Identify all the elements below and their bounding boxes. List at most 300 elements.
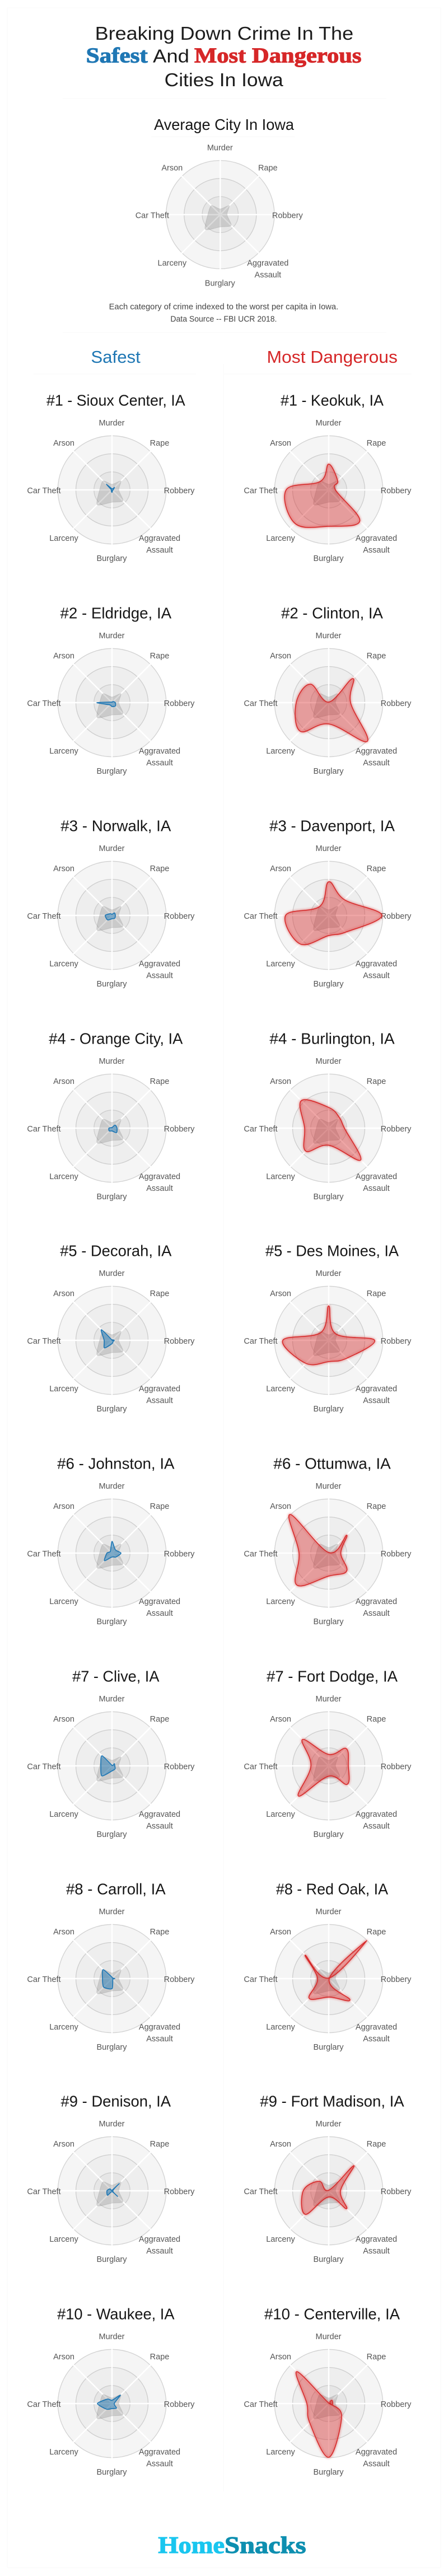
- axis labels: [27, 1908, 195, 2052]
- axis labels: Burglary: [314, 2468, 344, 2477]
- axis labels: Rape: [367, 2353, 386, 2362]
- axis labels: Larceny: [49, 1597, 79, 1606]
- axis labels: Assault: [363, 546, 390, 555]
- panel: #9 Fort Madison: [244, 2092, 412, 2264]
- axis labels: Larceny: [266, 960, 296, 969]
- heading: #1 - Keokuk, IA: [281, 391, 384, 409]
- column heading: safest: Safest: [91, 347, 141, 367]
- axis labels: Larceny: [266, 2448, 296, 2457]
- axis labels: Rape: [150, 2353, 169, 2362]
- panel: #4 Orange City: [27, 1030, 195, 1201]
- heading: #3 - Davenport, IA: [269, 817, 395, 834]
- heading: #7 - Clive, IA: [72, 1667, 160, 1685]
- axis labels: Aggravated: [356, 2448, 397, 2457]
- axis labels: Assault: [363, 1609, 390, 1618]
- title: Cities In Iowa: [165, 69, 283, 90]
- axis labels: Car Theft: [27, 1125, 61, 1134]
- data shape: [295, 679, 368, 742]
- axis labels: Assault: [363, 2460, 390, 2469]
- axis labels: Car Theft: [27, 1975, 61, 1984]
- axis labels: Burglary: [96, 1193, 127, 1201]
- axis labels: Aggravated: [139, 2448, 180, 2457]
- axis labels: Car Theft: [244, 699, 278, 708]
- axis labels: Robbery: [381, 487, 412, 495]
- axis labels: Assault: [146, 2247, 173, 2256]
- panel: #7 Fort Dodge: [244, 1667, 412, 1839]
- radar chart: [244, 1269, 412, 1414]
- axis labels: Car Theft: [27, 2400, 61, 2409]
- axis labels: Burglary: [314, 1617, 344, 1626]
- data shape: [97, 2395, 120, 2409]
- heading: #4 - Burlington, IA: [269, 1030, 395, 1047]
- axis labels: Assault: [363, 1822, 390, 1831]
- axis labels: Arson: [161, 163, 183, 172]
- axis labels: Burglary: [314, 1405, 344, 1414]
- axis labels: Rape: [150, 864, 169, 873]
- axis labels: Burglary: [96, 554, 127, 563]
- title: Safest: [86, 44, 148, 68]
- axis labels: Murder: [99, 632, 125, 641]
- axis labels: Burglary: [314, 554, 344, 563]
- panel: #1 Sioux Center: [27, 391, 195, 563]
- heading: #8 - Red Oak, IA: [276, 1880, 388, 1897]
- heading: #7 - Fort Dodge, IA: [267, 1667, 398, 1685]
- axis labels: [244, 1482, 412, 1626]
- axis labels: Robbery: [381, 699, 412, 708]
- data shape: [301, 2166, 354, 2214]
- radar chart: [27, 1269, 195, 1414]
- axis labels: [27, 844, 195, 989]
- heading: #10 - Waukee, IA: [57, 2305, 175, 2322]
- axis labels: [244, 1057, 412, 1201]
- heading: #8 - Carroll, IA: [66, 1880, 166, 1897]
- axis labels: Assault: [146, 1396, 173, 1405]
- data shape: [298, 1740, 349, 1796]
- axis labels: Assault: [146, 1822, 173, 1831]
- data shape: [284, 464, 360, 527]
- axis labels: Burglary: [314, 767, 344, 776]
- axis labels: Car Theft: [136, 211, 169, 220]
- axis labels: Arson: [270, 2353, 291, 2362]
- data shape: [296, 2372, 342, 2457]
- radar chart: [27, 844, 195, 989]
- data shape: [106, 484, 115, 493]
- axis labels: Aggravated: [139, 1172, 180, 1181]
- axis labels: [27, 632, 195, 776]
- axis labels: Murder: [316, 2120, 342, 2129]
- axis labels: Rape: [150, 1502, 169, 1511]
- axis labels: [244, 2332, 412, 2477]
- radar chart: [244, 632, 412, 776]
- axis labels: Car Theft: [27, 2187, 61, 2196]
- axis labels: Arson: [53, 2140, 74, 2149]
- axis labels: Rape: [367, 652, 386, 661]
- axis labels: Burglary: [96, 767, 127, 776]
- axis labels: Car Theft: [244, 912, 278, 921]
- axis labels: Rape: [367, 1715, 386, 1724]
- radar chart: [244, 1482, 412, 1626]
- axis labels: Murder: [99, 1057, 125, 1066]
- axis labels: Assault: [363, 759, 390, 768]
- title: [86, 23, 361, 90]
- heading: #9 - Denison, IA: [60, 2092, 171, 2110]
- axis labels: Larceny: [266, 2235, 296, 2244]
- axis labels: Arson: [53, 1502, 74, 1511]
- axis labels: Murder: [316, 1908, 342, 1916]
- axis labels: Aggravated: [356, 2023, 397, 2032]
- panel: #3 Davenport: [244, 817, 412, 989]
- axis labels: Car Theft: [244, 1337, 278, 1346]
- axis labels: Murder: [99, 1482, 125, 1491]
- axis labels: Larceny: [266, 747, 296, 756]
- axis labels: Rape: [150, 1077, 169, 1086]
- axis labels: Robbery: [164, 1762, 195, 1771]
- axis labels: Car Theft: [244, 2187, 278, 2196]
- axis labels: Robbery: [381, 912, 412, 921]
- axis labels: [136, 143, 303, 288]
- heading: #6 - Johnston, IA: [57, 1455, 175, 1472]
- axis labels: Robbery: [164, 1550, 195, 1559]
- axis labels: [27, 1269, 195, 1414]
- radar chart: [27, 2332, 195, 2477]
- axis labels: Aggravated: [139, 960, 180, 969]
- axis labels: Assault: [146, 971, 173, 980]
- axis labels: Larceny: [266, 1172, 296, 1181]
- radar chart: [27, 2120, 195, 2264]
- panel: #7 Clive: [27, 1667, 195, 1839]
- heading: #3 - Norwalk, IA: [60, 817, 171, 834]
- column heading: most dangerous: Most Dangerous: [267, 347, 398, 367]
- axis labels: Burglary: [314, 2255, 344, 2264]
- panel: #10 Waukee: [27, 2305, 195, 2477]
- axis labels: Murder: [316, 419, 342, 428]
- axis labels: Aggravated: [139, 2235, 180, 2244]
- axis labels: Robbery: [164, 487, 195, 495]
- axis labels: Burglary: [96, 1405, 127, 1414]
- axis labels: Murder: [316, 632, 342, 641]
- data shape: [101, 1756, 115, 1776]
- axis labels: Larceny: [266, 1810, 296, 1819]
- axis labels: Larceny: [49, 1385, 79, 1394]
- axis labels: Burglary: [96, 980, 127, 989]
- axis labels: Robbery: [272, 211, 303, 220]
- data shape: [285, 882, 382, 945]
- axis labels: Assault: [146, 1609, 173, 1618]
- axis labels: Aggravated: [356, 534, 397, 543]
- data shape: [282, 1306, 375, 1365]
- axis labels: [244, 1269, 412, 1414]
- axis labels: Larceny: [49, 1810, 79, 1819]
- axis labels: Larceny: [266, 2023, 296, 2032]
- axis labels: Assault: [255, 270, 281, 279]
- axis labels: Murder: [99, 1695, 125, 1704]
- axis labels: Rape: [367, 864, 386, 873]
- axis labels: Aggravated: [356, 1172, 397, 1181]
- heading: #10 - Centerville, IA: [264, 2305, 400, 2322]
- axis labels: Larceny: [266, 534, 296, 543]
- axis labels: Arson: [53, 1077, 74, 1086]
- panel: #6 Ottumwa: [244, 1455, 412, 1626]
- axis labels: Rape: [367, 1502, 386, 1511]
- axis labels: Larceny: [266, 1385, 296, 1394]
- axis labels: Robbery: [381, 1975, 412, 1984]
- axis labels: Larceny: [49, 1172, 79, 1181]
- axis labels: Car Theft: [244, 2400, 278, 2409]
- axis labels: Rape: [150, 1715, 169, 1724]
- axis labels: [244, 844, 412, 989]
- axis labels: [244, 2120, 412, 2264]
- axis labels: Aggravated: [356, 747, 397, 756]
- panel: #2 Clinton: [244, 604, 412, 776]
- axis labels: Larceny: [49, 534, 79, 543]
- axis labels: Larceny: [49, 2235, 79, 2244]
- panel: #1 Keokuk: [244, 391, 412, 563]
- axis labels: [244, 1695, 412, 1839]
- data shape: [102, 1970, 115, 1989]
- data shape: [109, 1125, 117, 1133]
- axis labels: Burglary: [96, 1617, 127, 1626]
- logo: HomeSnacks: Snacks: [225, 2533, 306, 2559]
- radar chart: [27, 1908, 195, 2052]
- axis labels: Burglary: [314, 1830, 344, 1839]
- axis labels: Murder: [316, 844, 342, 853]
- heading: #5 - Decorah, IA: [60, 1242, 172, 1259]
- panel: #9 Denison: [27, 2092, 195, 2264]
- axis labels: Murder: [207, 143, 233, 152]
- axis labels: [27, 1482, 195, 1626]
- panel: #5 Des Moines: [244, 1242, 412, 1414]
- axis labels: Aggravated: [356, 1810, 397, 1819]
- data source note: Data Source -- FBI UCR 2018.: [170, 315, 277, 324]
- heading: #5 - Des Moines, IA: [265, 1242, 399, 1259]
- axis labels: Robbery: [381, 1550, 412, 1559]
- panel: #5 Decorah: [27, 1242, 195, 1414]
- axis labels: Robbery: [381, 1125, 412, 1134]
- axis labels: Car Theft: [244, 1125, 278, 1134]
- axis labels: Aggravated: [247, 259, 288, 268]
- heading: #1 - Sioux Center, IA: [46, 391, 185, 409]
- axis labels: Burglary: [96, 2255, 127, 2264]
- heading: #2 - Clinton, IA: [281, 604, 383, 621]
- title: Most Dangerous: [194, 44, 362, 68]
- axis labels: Burglary: [96, 2043, 127, 2052]
- axis labels: Assault: [146, 1184, 173, 1193]
- axis labels: Larceny: [49, 2023, 79, 2032]
- axis labels: Aggravated: [139, 1810, 180, 1819]
- axis labels: Murder: [316, 1482, 342, 1491]
- panel: #6 Johnston: [27, 1455, 195, 1626]
- axis labels: Arson: [270, 1289, 291, 1298]
- data shape: [289, 1514, 347, 1586]
- panel: #4 Burlington: [244, 1030, 412, 1201]
- axis labels: Assault: [363, 1396, 390, 1405]
- axis labels: Robbery: [381, 2400, 412, 2409]
- axis labels: Car Theft: [244, 1975, 278, 1984]
- axis labels: Larceny: [49, 960, 79, 969]
- axis labels: Rape: [367, 439, 386, 448]
- axis labels: Robbery: [164, 1337, 195, 1346]
- logo: HomeSnacks: [158, 2533, 306, 2559]
- axis labels: Robbery: [164, 912, 195, 921]
- data source note: [109, 303, 338, 324]
- axis labels: Car Theft: [27, 699, 61, 708]
- axis labels: Larceny: [49, 747, 79, 756]
- axis labels: Assault: [363, 1184, 390, 1193]
- axis labels: Rape: [367, 1928, 386, 1937]
- axis labels: Rape: [150, 2140, 169, 2149]
- data shape: [107, 2184, 119, 2196]
- panel: average city: [109, 116, 338, 324]
- axis labels: [27, 1057, 195, 1201]
- axis labels: Arson: [270, 864, 291, 873]
- heading: #4 - Orange City, IA: [49, 1030, 183, 1047]
- axis labels: Robbery: [164, 2400, 195, 2409]
- heading: #9 - Fort Madison, IA: [260, 2092, 404, 2110]
- axis labels: Arson: [270, 1502, 291, 1511]
- axis labels: Car Theft: [244, 487, 278, 495]
- axis labels: Car Theft: [27, 912, 61, 921]
- axis labels: Larceny: [49, 2448, 79, 2457]
- axis labels: Larceny: [266, 1597, 296, 1606]
- axis labels: [27, 2332, 195, 2477]
- axis labels: Murder: [99, 1269, 125, 1278]
- data shape: [101, 1330, 114, 1348]
- axis labels: Aggravated: [139, 747, 180, 756]
- heading: #2 - Eldridge, IA: [60, 604, 171, 621]
- panel: #3 Norwalk: [27, 817, 195, 989]
- axis labels: Assault: [363, 971, 390, 980]
- axis labels: Burglary: [314, 2043, 344, 2052]
- axis labels: Assault: [146, 759, 173, 768]
- data source note: Each category of crime indexed to the worst per capita in Iowa.: [109, 303, 338, 312]
- axis labels: Aggravated: [356, 1597, 397, 1606]
- axis labels: Car Theft: [27, 1550, 61, 1559]
- title: And: [153, 46, 189, 67]
- axis labels: Aggravated: [356, 1385, 397, 1394]
- axis labels: Rape: [367, 2140, 386, 2149]
- axis labels: Murder: [99, 419, 125, 428]
- axis labels: Murder: [99, 844, 125, 853]
- axis labels: [27, 2120, 195, 2264]
- title: Breaking Down Crime In The: [95, 23, 353, 44]
- axis labels: Aggravated: [139, 1597, 180, 1606]
- radar chart: [244, 2332, 412, 2477]
- radar chart: [27, 1057, 195, 1201]
- axis labels: [244, 632, 412, 776]
- axis labels: [27, 1695, 195, 1839]
- axis labels: Burglary: [205, 279, 236, 288]
- axis labels: Robbery: [164, 1975, 195, 1984]
- axis labels: Car Theft: [27, 487, 61, 495]
- axis labels: Arson: [53, 439, 74, 448]
- axis labels: Murder: [316, 1269, 342, 1278]
- axis labels: Robbery: [164, 699, 195, 708]
- axis labels: Arson: [53, 652, 74, 661]
- axis labels: Arson: [53, 1928, 74, 1937]
- axis labels: Aggravated: [139, 2023, 180, 2032]
- data shape: [300, 1100, 361, 1161]
- axis labels: Murder: [99, 2120, 125, 2129]
- axis labels: Rape: [150, 439, 169, 448]
- axis labels: Burglary: [96, 2468, 127, 2477]
- axis labels: Rape: [367, 1289, 386, 1298]
- radar chart: [27, 1695, 195, 1839]
- axis labels: Larceny: [158, 259, 187, 268]
- axis labels: Assault: [363, 2035, 390, 2044]
- radar chart: average city: [136, 143, 303, 288]
- axis labels: Arson: [270, 1928, 291, 1937]
- axis labels: Rape: [367, 1077, 386, 1086]
- axis labels: Rape: [150, 652, 169, 661]
- data shape: [97, 702, 115, 707]
- axis labels: Arson: [270, 652, 291, 661]
- axis labels: Arson: [53, 1289, 74, 1298]
- axis labels: Aggravated: [356, 2235, 397, 2244]
- data shape: [305, 1941, 367, 2001]
- axis labels: Aggravated: [139, 534, 180, 543]
- radar chart: [244, 1695, 412, 1839]
- axis labels: Arson: [53, 1715, 74, 1724]
- axis labels: Car Theft: [27, 1762, 61, 1771]
- radar chart: [244, 1057, 412, 1201]
- axis labels: Arson: [270, 2140, 291, 2149]
- axis labels: Aggravated: [139, 1385, 180, 1394]
- radar chart: [244, 844, 412, 989]
- axis labels: Burglary: [314, 1193, 344, 1201]
- axis labels: [27, 419, 195, 563]
- axis labels: Murder: [316, 2332, 342, 2341]
- axis labels: [244, 1908, 412, 2052]
- axis labels: Aggravated: [356, 960, 397, 969]
- axis labels: Car Theft: [244, 1550, 278, 1559]
- axis labels: Burglary: [314, 980, 344, 989]
- panel: #10 Centerville: [244, 2305, 412, 2477]
- axis labels: Robbery: [381, 1337, 412, 1346]
- radar chart: [27, 419, 195, 563]
- radar chart: [27, 632, 195, 776]
- radar chart: [244, 419, 412, 563]
- axis labels: Arson: [270, 439, 291, 448]
- axis labels: Rape: [150, 1289, 169, 1298]
- radar chart: [27, 1482, 195, 1626]
- axis labels: Rape: [258, 163, 278, 172]
- axis labels: Robbery: [381, 1762, 412, 1771]
- axis labels: Assault: [146, 2460, 173, 2469]
- axis labels: Robbery: [164, 1125, 195, 1134]
- data shape: [105, 913, 115, 920]
- axis labels: Arson: [270, 1715, 291, 1724]
- axis labels: Arson: [53, 864, 74, 873]
- axis labels: Assault: [146, 546, 173, 555]
- axis labels: Assault: [146, 2035, 173, 2044]
- radar chart: [244, 1908, 412, 2052]
- panel: #8 Carroll: [27, 1880, 195, 2052]
- axis labels: Murder: [316, 1057, 342, 1066]
- radar chart: [244, 2120, 412, 2264]
- axis labels: Murder: [316, 1695, 342, 1704]
- axis labels: Arson: [53, 2353, 74, 2362]
- panel: #2 Eldridge: [27, 604, 195, 776]
- axis labels: [244, 419, 412, 563]
- axis labels: Robbery: [164, 2187, 195, 2196]
- axis labels: Robbery: [381, 2187, 412, 2196]
- panel: #8 Red Oak: [244, 1880, 412, 2052]
- axis labels: Rape: [150, 1928, 169, 1937]
- axis labels: Car Theft: [27, 1337, 61, 1346]
- axis labels: Burglary: [96, 1830, 127, 1839]
- heading: #6 - Ottumwa, IA: [273, 1455, 391, 1472]
- axis labels: Arson: [270, 1077, 291, 1086]
